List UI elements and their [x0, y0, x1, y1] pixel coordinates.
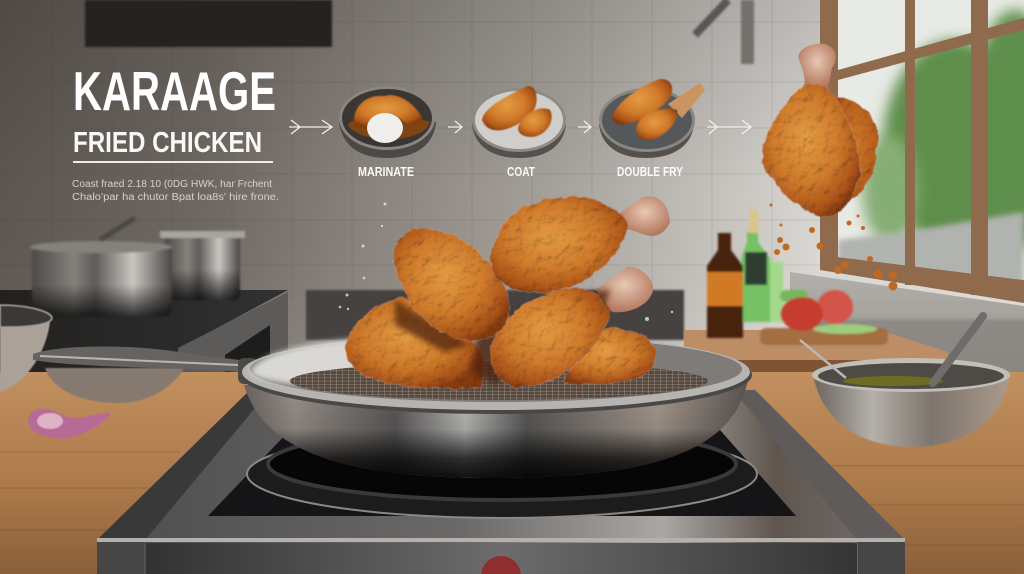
crevice shadows: [395, 290, 610, 385]
burner ring: [247, 430, 757, 518]
description text: Coast fraed 2.18 10 (0DG HWK, har Frchent: [72, 179, 272, 190]
description text: [72, 179, 279, 203]
fried chicken pile: [345, 196, 670, 389]
flying drumstick meat: [762, 83, 860, 216]
top drumstick: [490, 196, 628, 293]
pan rim: [240, 336, 752, 414]
left bowl: [0, 305, 52, 392]
step label: double fry: DOUBLE FRY: [617, 165, 684, 179]
arrow: coat to double fry: [578, 121, 591, 133]
induction stove: [97, 390, 905, 574]
oil droplets: [339, 202, 673, 321]
back counter: [0, 290, 684, 372]
window: [820, 0, 1024, 303]
arrow: title to marinate: [289, 120, 332, 134]
title: KARAAGE: [73, 60, 276, 122]
stove logo badge: [481, 556, 521, 574]
window ledge: [790, 272, 1024, 372]
subtitle: FRIED CHICKEN: [73, 127, 262, 159]
drumstick center bone: [596, 267, 653, 312]
step bowl: double fry: [599, 79, 705, 158]
arrow: marinate to coat: [448, 121, 462, 133]
description text: Chalo'par ha chutor Bpat loa8s' hire frone.: [72, 192, 279, 203]
pan handle joint: [238, 358, 258, 384]
stock pots: [30, 218, 245, 316]
stove front panel: [146, 543, 857, 574]
wooden table: [0, 372, 1024, 574]
frying pan: [238, 334, 752, 478]
step bowl: marinate: [339, 86, 436, 158]
title underline: [73, 161, 273, 163]
back left pan with handle: [33, 346, 240, 403]
center drumstick: [490, 287, 610, 388]
top left chicken: [393, 228, 510, 341]
step bowl: coat: [472, 86, 566, 158]
wire rack: [290, 362, 708, 400]
right bowl with ladle: [800, 316, 1010, 447]
pan body: [244, 380, 748, 478]
stove glass plate: [208, 430, 796, 516]
tomatoes and cutting board: [760, 290, 888, 345]
red onion slice: [28, 409, 111, 439]
drumstick upper bone: [620, 196, 670, 236]
bottles: [707, 210, 783, 338]
step label: coat: COAT: [507, 165, 535, 179]
flying drumstick: [762, 44, 878, 216]
range hood: [85, 0, 332, 47]
step label: marinate: MARINATE: [358, 165, 414, 179]
flying drumstick bone: [798, 44, 836, 88]
flying drumstick rear lobe: [831, 98, 878, 199]
wall background with tiles: [0, 0, 1024, 380]
falling crumbs: [770, 204, 898, 290]
arrow: double fry to chicken: [707, 120, 751, 134]
lower left chicken: [345, 297, 484, 389]
right small chicken: [563, 327, 657, 384]
wall faucet: [695, 0, 754, 64]
right side counter: [684, 330, 948, 372]
